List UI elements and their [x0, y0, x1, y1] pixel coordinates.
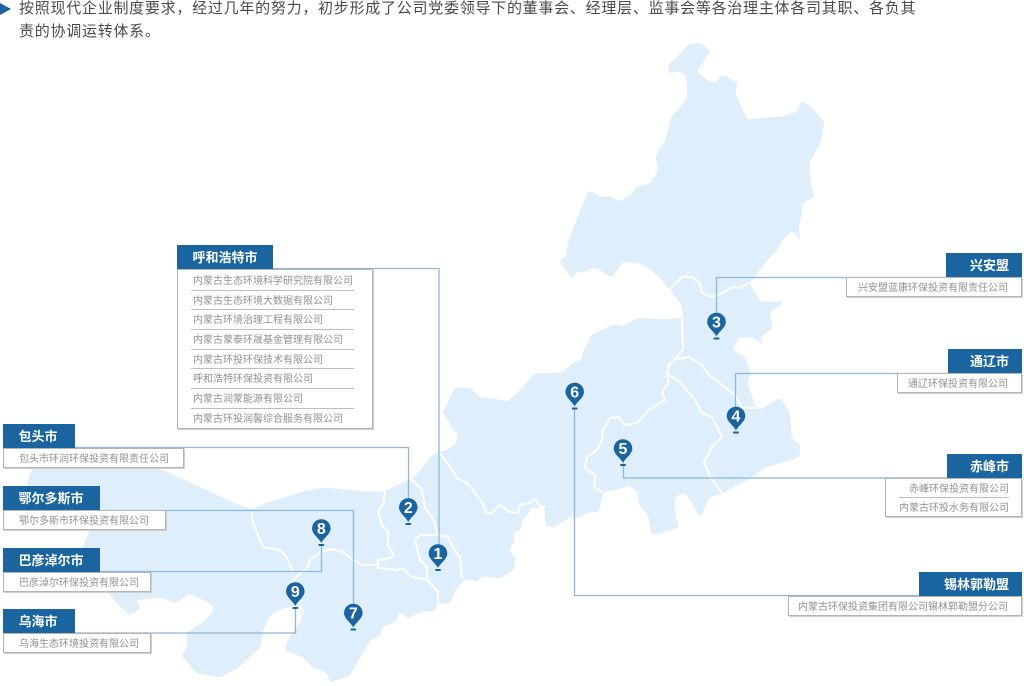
- pin 3: 3: [712, 314, 721, 332]
- panel: 锡林郭勒盟: 内蒙古环保投资集团有限公司锡林郭勒盟分公司: [798, 602, 1008, 613]
- panel: 呼和浩特市: 内蒙古环境治理工程有限公司: [193, 315, 323, 326]
- pin 8: 8: [317, 521, 326, 538]
- panel: 赤峰市: [885, 454, 1023, 518]
- panel: 巴彦淖尔市: [3, 548, 152, 593]
- pin 9: [286, 582, 305, 609]
- panel: 通辽市: 通辽环保投资有限公司: [908, 379, 1008, 390]
- region borders: [252, 277, 755, 613]
- panel: 兴安盟: 兴安盟蓝康环保投资有限责任公司: [858, 283, 1008, 294]
- map outline: [27, 43, 824, 682]
- map: regions of Inner Mongolia: [27, 43, 824, 682]
- panel: 呼和浩特市: 内蒙古润蒙能源有限公司: [193, 394, 303, 405]
- panel: 赤峰市: 内蒙古环投水务有限公司: [899, 503, 1009, 514]
- pin 7: 7: [349, 606, 358, 622]
- pin 1: 1: [434, 546, 443, 563]
- icon: bullet triangle: [0, 3, 11, 15]
- pin 7: [344, 604, 363, 630]
- pin 5: [614, 439, 632, 466]
- panel: 锡林郭勒盟: 锡林郭勒盟: [944, 577, 1009, 592]
- panel: 鄂尔多斯市: [3, 486, 167, 531]
- panel: 巴彦淖尔市: 巴彦淖尔环保投资有限公司: [19, 578, 139, 588]
- connector lines: [75, 268, 948, 633]
- pin 2: [399, 498, 418, 525]
- panel: 鄂尔多斯市: 鄂尔多斯市: [18, 491, 84, 506]
- panel: 呼和浩特市: 内蒙古环投环保技术有限公司: [193, 355, 323, 366]
- panel: 兴安盟: 兴安盟: [970, 258, 1009, 273]
- panel: 通辽市: [897, 349, 1023, 394]
- panel: 通辽市: 通辽市: [970, 354, 1009, 369]
- panel: 乌海市: 乌海生态环境投资有限公司: [19, 639, 139, 650]
- panel: 赤峰市: 赤峰市: [970, 459, 1009, 474]
- panel: 呼和浩特市: [177, 245, 374, 430]
- pin 6: 6: [570, 384, 579, 402]
- panel: 呼和浩特市: 呼和浩特环保投资有限公司: [193, 374, 313, 385]
- pin 3: [707, 313, 726, 340]
- pin 1: [429, 544, 447, 571]
- panel: 呼和浩特市: 内蒙古环投润馨综合服务有限公司: [193, 414, 343, 425]
- panel: 乌海市: [3, 609, 152, 654]
- pin 5: 5: [619, 441, 628, 458]
- pin 2: 2: [404, 500, 413, 517]
- pin 4: 4: [732, 408, 741, 426]
- panel: 赤峰市: 赤峰环保投资有限公司: [909, 484, 1009, 495]
- pin 9: 9: [291, 584, 300, 601]
- panel: 乌海市: 乌海市: [18, 614, 58, 629]
- panel: 包头市: 包头市: [18, 429, 58, 444]
- pin 8: [312, 519, 331, 546]
- pin 6: [565, 383, 584, 410]
- intro text: 按照现代企业制度要求，经过几年的努力，初步形成了公司党委领导下的董事会、经理层、监事会等各治理主体各司其职、各负其责的协调运转体系。: [19, 0, 916, 40]
- pin 4: [727, 407, 745, 434]
- panel: 包头市: 包头市环润环保投资有限责任公司: [19, 454, 169, 465]
- panel: 锡林郭勒盟: [788, 572, 1023, 617]
- panel: 兴安盟: [846, 253, 1023, 298]
- panel: 呼和浩特市: 内蒙古生态环境科学研究院有限公司: [193, 276, 353, 287]
- panel: 鄂尔多斯市: 鄂尔多斯市环保投资有限公司: [19, 516, 149, 527]
- panel: 呼和浩特市: 呼和浩特市: [192, 250, 258, 265]
- panel: 巴彦淖尔市: 巴彦淖尔市: [18, 552, 84, 568]
- panel: 呼和浩特市: 内蒙古生态环境大数据有限公司: [193, 296, 333, 307]
- panel: 包头市: [3, 424, 185, 469]
- panel: 呼和浩特市: 内蒙古蒙泰环晟基金管理有限公司: [193, 335, 343, 346]
